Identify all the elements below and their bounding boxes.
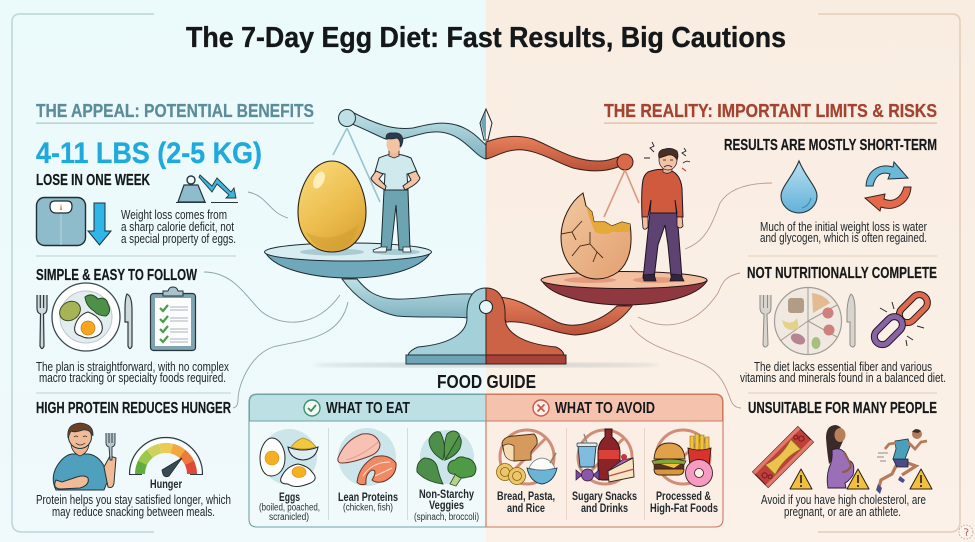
icon: satisfied man with fork — [53, 423, 116, 490]
pivot — [480, 300, 492, 314]
icon: processed foods — [652, 430, 712, 486]
label: eggs: Eggs — [279, 492, 300, 504]
left strings — [333, 128, 380, 202]
label: lean proteins: Lean Proteins — [338, 492, 398, 504]
stand pillar left — [408, 288, 486, 355]
text: calorie deficit: Weight loss comes from — [121, 208, 227, 222]
icon: bathroom scale — [36, 198, 86, 246]
icon: warning 1 — [790, 469, 812, 489]
icon: bread pasta rice — [496, 430, 557, 484]
frame: left panel outline — [12, 14, 154, 532]
icon: clipboard checklist — [150, 287, 196, 350]
icon: knife — [125, 294, 132, 348]
text: calorie deficit: a sharp calorie deficit, not — [121, 220, 234, 234]
heading: food guide: FOOD GUIDE — [437, 372, 536, 392]
icon: fork grey — [760, 295, 771, 347]
icon: fork — [37, 295, 47, 348]
text: plan is straightforward: The plan is straightforward, with no complex — [36, 360, 230, 374]
label: sugary snacks: and Drinks — [581, 503, 628, 515]
icon: lean proteins — [338, 428, 396, 486]
text: protein satisfied — [36, 493, 231, 519]
icon: vegetables — [417, 430, 476, 486]
icon: broken chain — [871, 291, 931, 348]
text: calorie deficit: a special property of eggs. — [121, 232, 236, 246]
icon: knife grey — [847, 294, 855, 347]
text: protein satisfied: may reduce snacking between meals. — [52, 505, 215, 519]
frame: right panel outline — [818, 14, 960, 532]
icon: x mark — [533, 400, 549, 416]
eat column body — [249, 394, 486, 527]
icon: incomplete plate — [774, 288, 842, 354]
icon: cycle arrows — [865, 162, 911, 211]
balance scale — [264, 109, 707, 368]
label: vegetables: Non-Starchy — [419, 489, 474, 501]
panel: the reality / limits and risks — [604, 100, 946, 519]
right beam — [486, 136, 618, 171]
right beam end — [617, 154, 633, 170]
icon: check — [304, 400, 320, 416]
icon: warning 2 — [847, 469, 869, 489]
heading: the appeal: THE APPEAL: POTENTIAL BENEFITS — [36, 100, 314, 121]
text: calorie deficit — [121, 208, 236, 246]
icon: water drop — [781, 161, 817, 213]
icon: warning 3 — [910, 469, 932, 489]
label: eggs: scranicled) — [269, 512, 309, 523]
label: processed foods — [650, 491, 718, 515]
what to eat label: WHAT TO EAT — [326, 400, 410, 417]
text: avoid if: Avoid if you have high cholesterol, are — [761, 493, 926, 507]
icon: eggs — [260, 429, 318, 486]
connector curves — [204, 183, 772, 408]
label: lean proteins: (chicken, fish) — [343, 502, 393, 514]
subheading: lose in one week: LOSE IN ONE WEEK — [36, 172, 150, 189]
left beam end — [338, 110, 356, 126]
text: water and glycogen: and glycogen, which is often regained. — [760, 231, 927, 245]
label: bread pasta rice: Bread, Pasta, — [497, 491, 555, 503]
icon: runner — [876, 429, 927, 494]
gauge: hunger meter: Hunger — [150, 479, 182, 491]
icon: clogged artery — [753, 427, 813, 487]
stand pillar right — [486, 288, 564, 355]
cracked egg — [561, 193, 631, 279]
gauge: hunger meter — [129, 438, 203, 491]
lower arm left — [342, 279, 472, 318]
stand base — [406, 355, 566, 364]
text: lacks fiber — [740, 360, 946, 385]
text: avoid if — [761, 493, 926, 519]
left beam — [352, 113, 486, 159]
label: lean proteins — [338, 492, 398, 514]
subheading: high protein: HIGH PROTEIN REDUCES HUNGER — [36, 400, 231, 417]
icon: sugary snacks — [576, 429, 634, 484]
what to avoid column — [486, 394, 723, 527]
right pan — [541, 272, 707, 305]
label: eggs — [259, 492, 320, 523]
text: lacks fiber: The diet lacks essential fiber and various — [754, 360, 932, 374]
title: The 7-Day Egg Diet: Fast Results, Big Cautions — [186, 22, 786, 54]
avoid column body — [486, 394, 723, 527]
finial — [480, 109, 492, 140]
text: protein satisfied: Protein helps you stay satisfied longer, which — [36, 493, 231, 507]
label: vegetables — [414, 489, 479, 523]
icon: pregnant woman — [826, 425, 854, 488]
icon: plate with egg — [52, 283, 120, 351]
icon: down arrow — [88, 203, 111, 245]
label: processed foods: High-Fat Foods — [650, 503, 718, 515]
icon: weight with falling arrow — [176, 175, 238, 202]
big stat: pounds lost: 4-11 LBS (2-5 KG) — [36, 137, 262, 170]
subheading: simple and easy: SIMPLE & EASY TO FOLLOW — [36, 267, 198, 284]
text: avoid if: pregnant, or are an athlete. — [784, 505, 901, 519]
right strings — [604, 170, 639, 217]
left pan — [264, 243, 432, 278]
watermark sparkle — [959, 525, 973, 539]
label: processed foods: Processed & — [656, 491, 711, 503]
label: bread pasta rice — [497, 491, 555, 515]
panel: food guide — [249, 372, 723, 527]
eat header band — [250, 394, 486, 421]
label: sugary snacks: Sugary Snacks — [572, 491, 637, 503]
lower arm right — [498, 297, 632, 335]
avoid header band — [486, 394, 722, 421]
label: vegetables: Veggies — [429, 500, 464, 512]
label: sugary snacks — [572, 491, 637, 515]
what to eat column — [249, 394, 486, 527]
confident man — [371, 133, 420, 252]
label: vegetables: (spinach, broccoli) — [414, 512, 479, 523]
golden egg — [298, 161, 366, 252]
worried man — [642, 142, 690, 281]
panel: the appeal / potential benefits — [36, 100, 314, 519]
what to avoid label: WHAT TO AVOID — [555, 400, 655, 417]
text: plan is straightforward: macro tracking or specialty foods required. — [39, 371, 226, 385]
label: bread pasta rice: and Rice — [507, 503, 545, 515]
text: water and glycogen: Much of the initial weight loss is water — [760, 220, 927, 234]
text: water and glycogen — [760, 220, 927, 245]
label: eggs: (boiled, poached, — [259, 502, 320, 514]
text: plan is straightforward — [36, 360, 230, 385]
scale shadow — [314, 362, 658, 368]
